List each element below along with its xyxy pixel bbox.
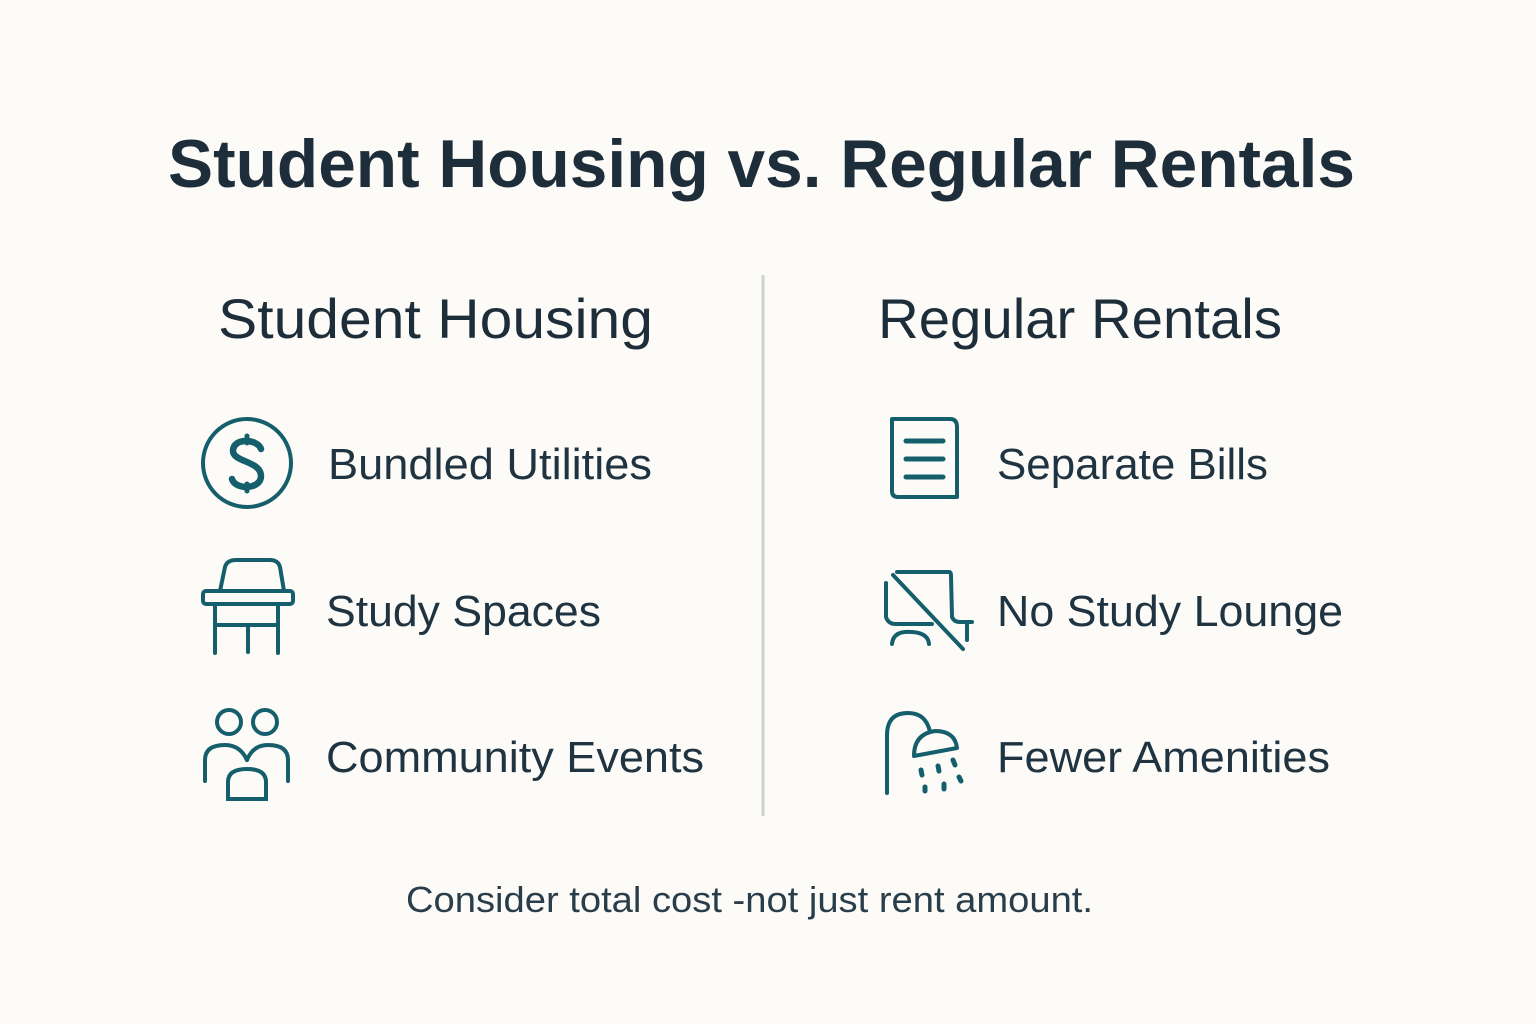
text: bundled utilities: Bundled Utilities (328, 440, 652, 489)
title: Student Housing vs. Regular Rentals (168, 126, 1355, 202)
icon: dollar (203, 419, 291, 507)
heading: student housing: Student Housing (218, 287, 653, 350)
icon: desk (203, 560, 293, 653)
panel: regular rentals (878, 287, 1343, 793)
icon: document (892, 419, 957, 497)
text: fewer amenities: Fewer Amenities (997, 733, 1330, 782)
text: community events: Community Events (326, 733, 704, 782)
text: no study lounge: No Study Lounge (997, 587, 1343, 636)
icon: shower (887, 713, 961, 793)
text: study spaces: Study Spaces (326, 587, 601, 636)
panel: student housing (203, 287, 704, 799)
footer note: Consider total cost -not just rent amount. (406, 879, 1093, 920)
text: separate bills: Separate Bills (997, 440, 1268, 489)
icon: community (205, 710, 288, 799)
icon: no lounge (886, 572, 972, 649)
heading: regular rentals: Regular Rentals (878, 287, 1282, 350)
